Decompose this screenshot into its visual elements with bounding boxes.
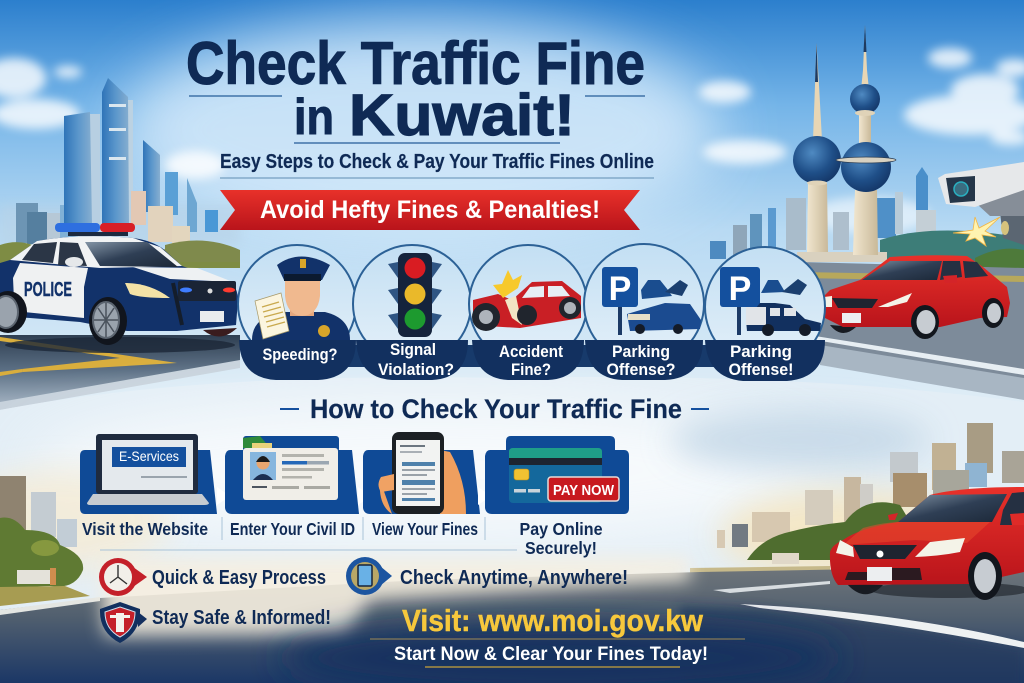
- arrow 2: [358, 487, 371, 505]
- subtitle: Easy Steps to Check & Pay Your Traffic Fines Online: [220, 150, 654, 173]
- feature: anytime anywhere: Check Anytime, Anywhere!: [400, 567, 628, 589]
- badge: parking offense question: Parking: [612, 342, 670, 361]
- title: Kuwait!: [349, 83, 575, 148]
- badge: accident fine: Fine?: [511, 360, 551, 379]
- icon: hand with phone: [378, 432, 466, 514]
- feature: stay safe: [100, 602, 331, 643]
- Kuwait Towers: [793, 25, 896, 262]
- icon: parking sign and tow truck: P: [609, 270, 631, 308]
- website callout: [370, 603, 745, 667]
- right skyline: [710, 167, 1024, 272]
- clouds: [0, 48, 1024, 233]
- badge: signal violation: [353, 245, 471, 380]
- left skyline: [0, 78, 240, 245]
- feature: anytime anywhere: [346, 557, 628, 595]
- badge: parking offense exclamation: Parking: [730, 342, 792, 361]
- step 2: enter civil id: Enter Your Civil ID: [230, 519, 355, 539]
- badge: parking offense exclamation: Offense!: [728, 360, 794, 379]
- cream band behind feature list: [100, 558, 690, 636]
- icon: credit card and pay now: [509, 448, 619, 503]
- icon: crashed car: [472, 270, 581, 331]
- step 2: enter civil id: [225, 436, 359, 539]
- badge: signal violation: Violation?: [378, 360, 454, 379]
- badge: accident fine: Accident: [499, 342, 563, 361]
- icon: civil id card: [243, 436, 338, 500]
- badge: parking offense question: Offense?: [606, 360, 676, 379]
- bottom right red car: [830, 487, 1024, 600]
- badge: speeding: [238, 245, 356, 380]
- arrow 3: [478, 487, 491, 505]
- bottom right skyline and trees: [690, 423, 1024, 574]
- icon: laptop: E-Services: [119, 449, 179, 464]
- navy connector behind badges: [250, 345, 815, 367]
- step 4: pay online: Pay Online: [520, 519, 603, 539]
- step 1: visit the website: Visit the Website: [82, 519, 208, 539]
- background sky: [0, 0, 1024, 420]
- badge: parking offense exclamation: [705, 247, 825, 381]
- website callout: Visit: www.moi.gov.kw: [402, 603, 704, 638]
- badge: accident fine: [469, 245, 587, 380]
- title: in: [294, 89, 334, 145]
- mid haze: [0, 377, 1024, 620]
- title: Check Traffic Fine: [186, 30, 645, 97]
- step 4: pay online: [485, 436, 629, 558]
- badge: signal violation: Signal: [390, 340, 436, 359]
- bottom left skyline and trees: [0, 476, 90, 606]
- police car: [0, 223, 238, 353]
- step 3: view fines: View Your Fines: [372, 519, 478, 539]
- light bar: [55, 223, 135, 236]
- section heading: How to Check Your Traffic Fine: [310, 394, 682, 424]
- feature: quick and easy: [99, 558, 326, 596]
- red banner: Avoid Hefty Fines & Penalties!: [260, 196, 600, 224]
- tower base: [797, 252, 887, 262]
- step 1: visit the website: [80, 434, 217, 539]
- treeline and roads upper: [0, 241, 1024, 410]
- badge: parking offense question: [584, 244, 704, 380]
- icon: clock: [99, 558, 147, 596]
- step 3: view fines: [363, 432, 480, 539]
- icon: parking sign and car: P: [729, 270, 751, 308]
- red banner: [220, 190, 640, 230]
- bottom road: [0, 566, 1024, 683]
- icon: police officer: [252, 256, 350, 340]
- security camera: [938, 162, 1024, 246]
- title: [186, 30, 645, 148]
- icon: credit card and pay now: PAY NOW: [553, 482, 615, 499]
- arrow 1: [217, 487, 230, 505]
- step 4: pay online: Securely!: [525, 538, 597, 558]
- feature: quick and easy: Quick & Easy Process: [152, 567, 326, 589]
- feature: stay safe: Stay Safe & Informed!: [152, 607, 331, 629]
- icon: globe and tablet: [346, 557, 392, 595]
- icon: traffic light: [388, 253, 442, 337]
- right red car: [823, 255, 1010, 339]
- police lettering: POLICE: [24, 279, 72, 301]
- icon: shield: [100, 602, 147, 643]
- dark footer glow: [280, 622, 840, 683]
- badge: speeding: Speeding?: [262, 345, 338, 364]
- camera flash: [953, 217, 1000, 246]
- website callout: Start Now & Clear Your Fines Today!: [394, 644, 708, 665]
